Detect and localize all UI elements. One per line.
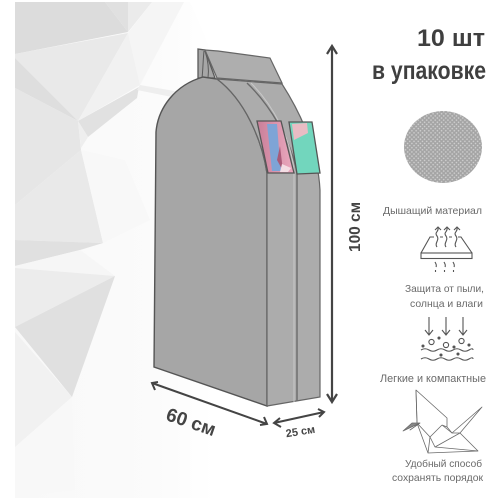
arrow: height [327, 46, 337, 402]
text: light and compact: Легкие и компактные [380, 373, 486, 385]
bag side panel [154, 77, 267, 406]
bag handle [198, 49, 215, 78]
text: breathable material: Дышащий материал [383, 206, 482, 217]
text: convenient way: сохранять порядок [392, 473, 483, 484]
icon: light weight [421, 317, 473, 360]
icon: breathing layers [421, 227, 472, 272]
arrow: depth [274, 409, 324, 427]
icon: mesh fabric swatch [404, 111, 482, 183]
background: low-poly pattern [15, 2, 215, 498]
text: convenient way [392, 458, 483, 484]
bag front panel [217, 79, 320, 406]
zipper seam [247, 83, 297, 401]
right window [289, 122, 320, 174]
label: depth: 25 см [285, 424, 316, 440]
arrow: width [152, 382, 267, 425]
text: protection [405, 284, 484, 310]
text: protection: Защита от пыли, [405, 284, 484, 295]
heading: 10 шт [417, 25, 485, 52]
text: protection: солнца и влаги [410, 299, 483, 310]
heading [372, 25, 486, 85]
left window [257, 121, 294, 173]
icon: origami crane [403, 390, 482, 453]
product: garment bag [154, 49, 320, 406]
top flap [205, 50, 282, 83]
label: width: 60 см [163, 405, 218, 441]
label: height: 100 см [347, 202, 364, 252]
text: convenient way: Удобный способ [405, 458, 482, 470]
